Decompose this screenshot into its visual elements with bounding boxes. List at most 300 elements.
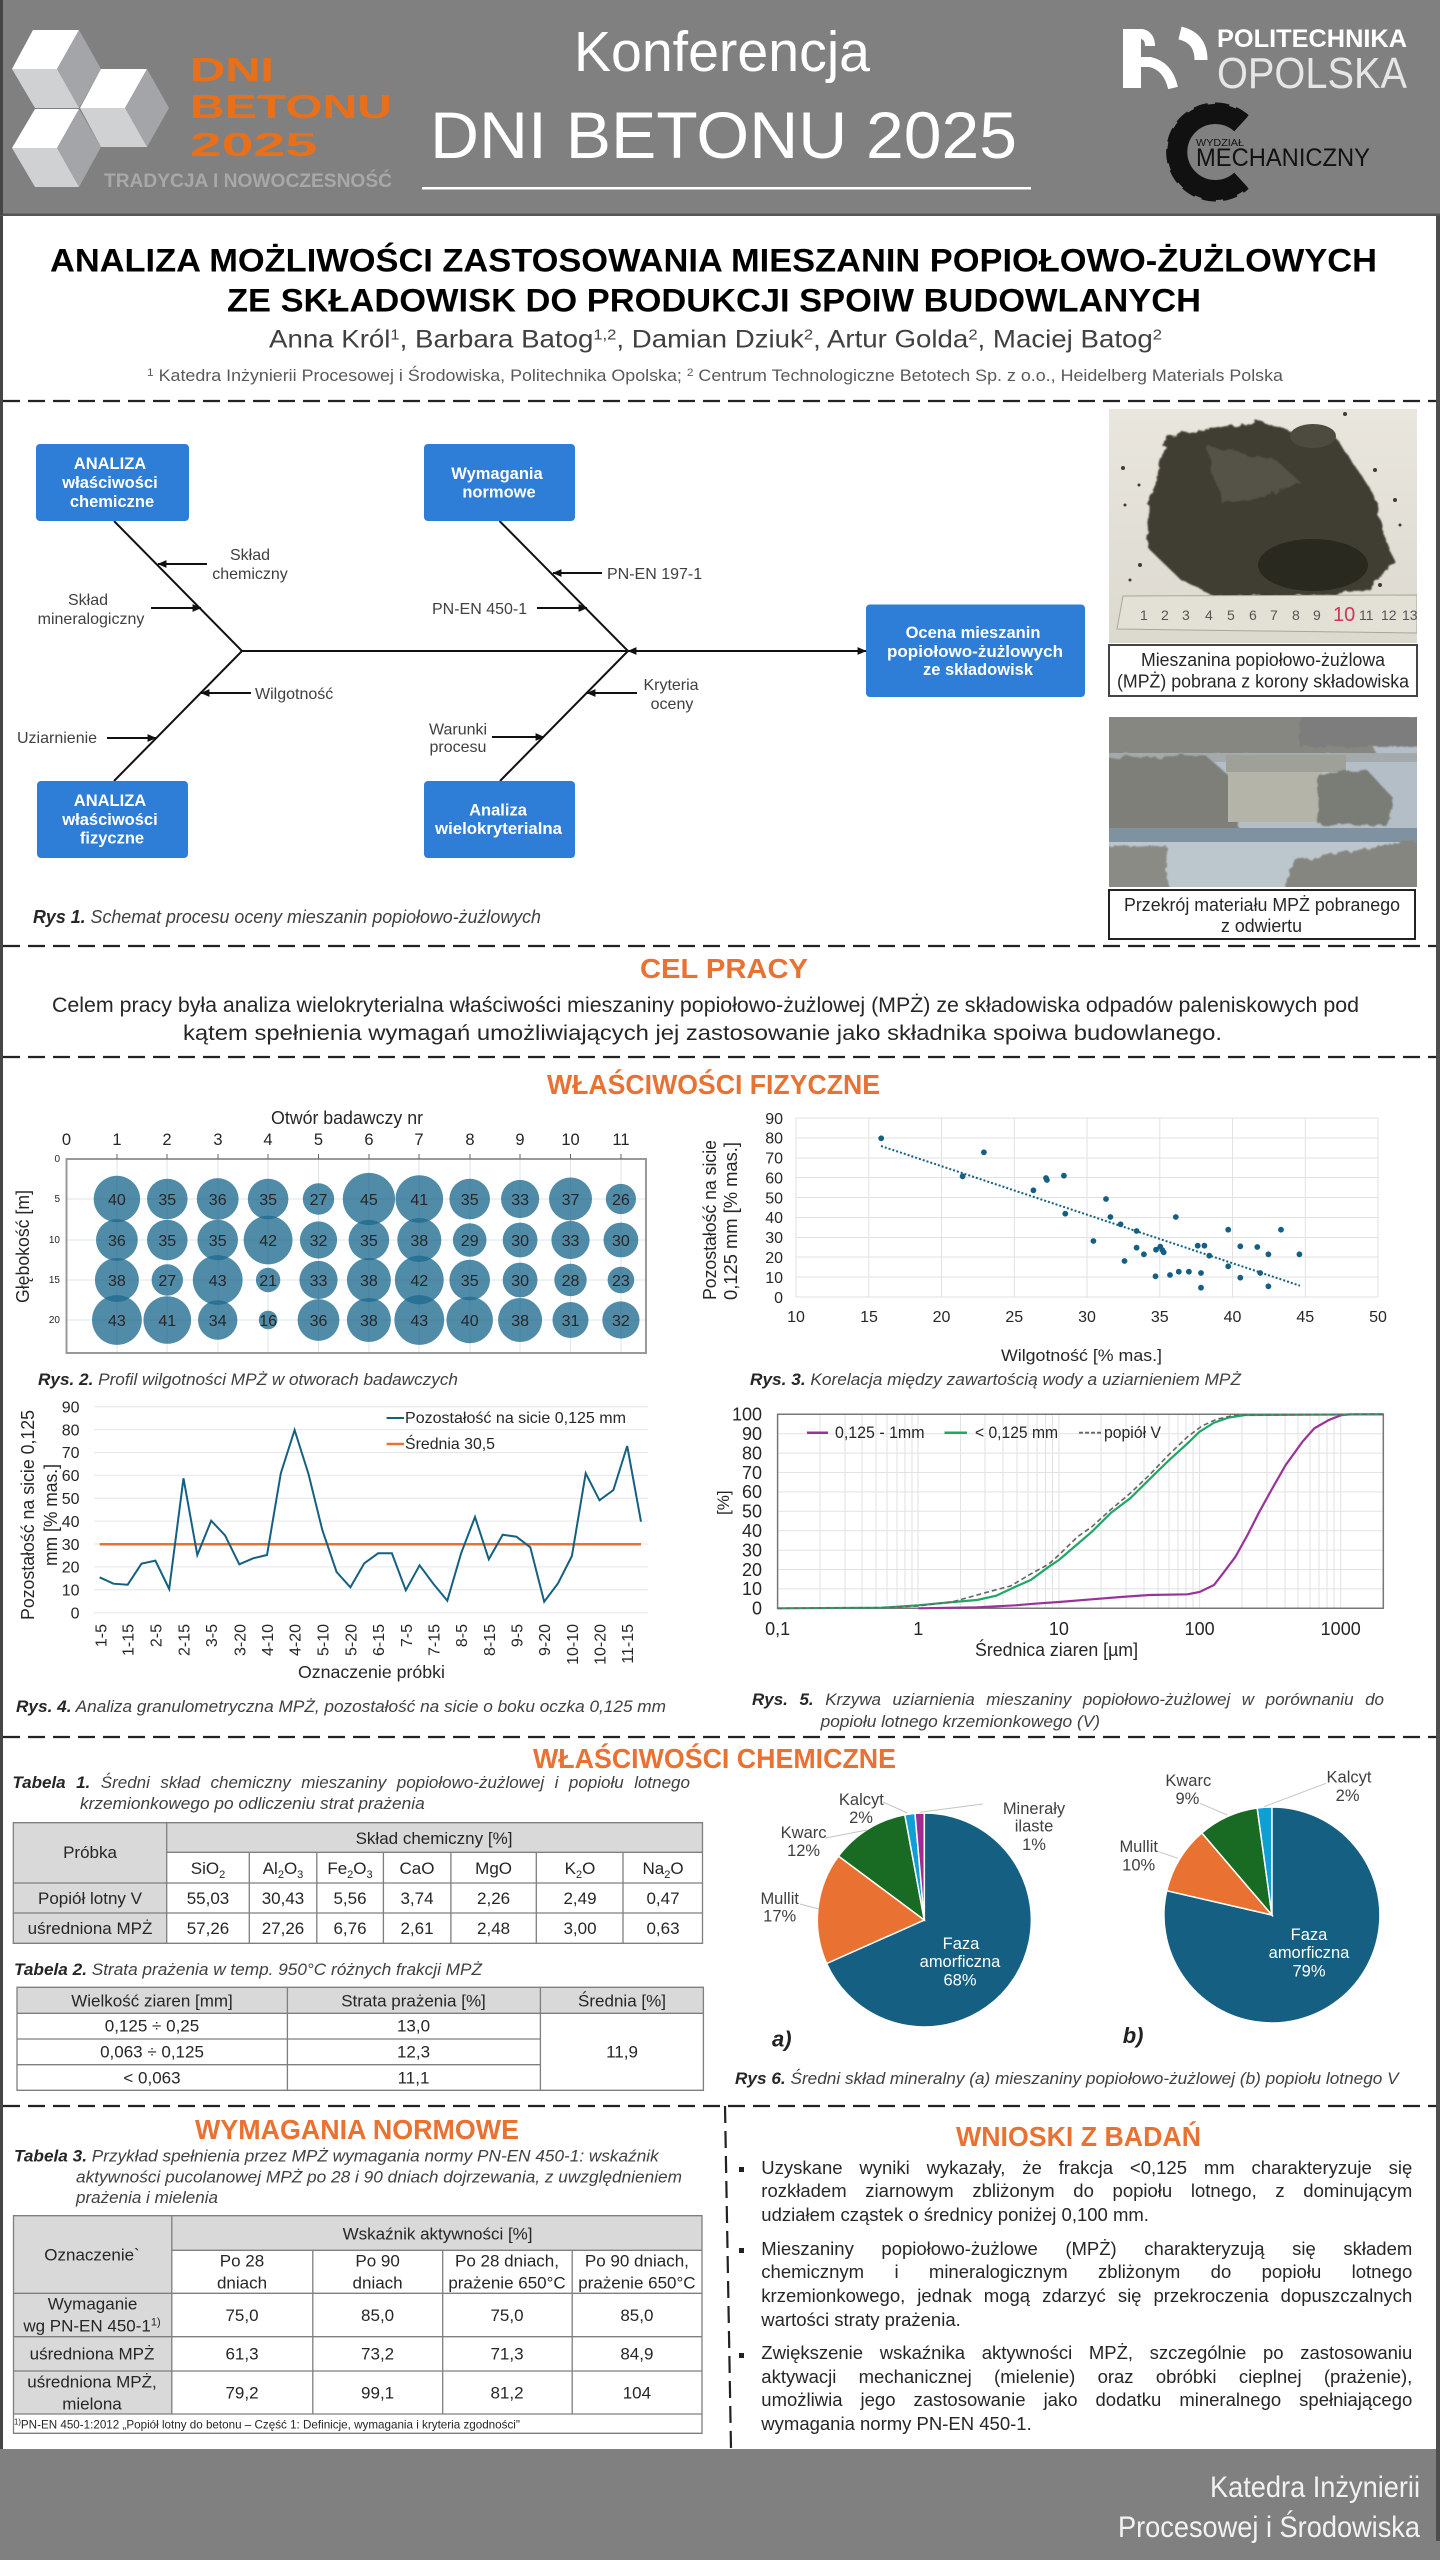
line chart axes: 11-15	[620, 1624, 637, 1664]
bubble chart axes: 8	[465, 1131, 475, 1149]
table 3 caption: prażenia i mielenia	[75, 2188, 218, 2207]
logo text: Dni Betonu 2025: TRADYCJA I NOWOCZESNOŚĆ	[104, 170, 392, 192]
heading: conclusions: WNIOSKI Z BADAŃ	[956, 2121, 1201, 2152]
line chart axes: 3-5	[204, 1624, 221, 1647]
table 1: chemical composition: MgO	[475, 1859, 512, 1878]
table 1: chemical composition: 30,43	[262, 1889, 304, 1908]
table 3: activity index: Wymaganie	[48, 2294, 137, 2313]
logo text: Dni Betonu 2025	[104, 51, 392, 192]
PSD axes: 1	[913, 1619, 923, 1639]
bubble values: 30	[511, 1273, 529, 1290]
bubble values: 38	[511, 1313, 529, 1330]
bubble values: 33	[511, 1192, 529, 1209]
authors: , Maciej Batog	[978, 326, 1153, 354]
bullet 1	[738, 2166, 744, 2172]
bubble values: 43	[108, 1313, 126, 1330]
table 1: chemical composition: O	[582, 1859, 595, 1878]
bubble chart axes: 10	[49, 1235, 60, 1246]
pie chart b: fly ash: Kalcyt	[1327, 1769, 1372, 1787]
scatter axes: 50	[1369, 1309, 1387, 1326]
conclusion 2	[761, 2238, 1412, 2330]
bubble chart axes: 9	[515, 1131, 525, 1149]
table 2: loss on ignition: 0,063 ÷ 0,125	[100, 2043, 204, 2062]
affiliations: 2	[687, 367, 693, 379]
conclusion 3: umożliwia jego zastosowanie jako dodatku mineralnego spełniającego	[761, 2389, 1412, 2410]
caption: Rys 6: Rys 6. Średni skład mineralny (a) mieszaniny popiołowo-żużlowej (b) popiołu lotnego V	[735, 2069, 1400, 2088]
table 3: activity index	[14, 2216, 702, 2433]
table 3: activity index: 75,0	[225, 2306, 259, 2325]
fishbone labels: procesu	[430, 739, 486, 756]
fishbone diagram	[17, 444, 1085, 858]
photo: MPZ sample pile: 1	[1140, 607, 1148, 623]
scatter axes: 0,125 mm [% mas.]	[721, 1142, 741, 1300]
pie chart b: fly ash: 2%	[1336, 1787, 1360, 1805]
pie chart a: MPZ: a)	[772, 2027, 792, 2052]
line chart axes: 4-10	[260, 1624, 277, 1656]
photo: MPZ sample pile: 2	[1161, 607, 1169, 623]
table 3: activity index: 104	[623, 2383, 651, 2402]
table 2: loss on ignition: < 0,063	[123, 2068, 181, 2087]
footer band: Katedra Inżynierii	[1210, 2471, 1420, 2504]
pie chart b: fly ash: b)	[1123, 2023, 1143, 2048]
scatter axes: 60	[765, 1170, 783, 1188]
line chart axes: 10-20	[592, 1624, 610, 1665]
caption: Rys 3: Rys. 3. Korelacja między zawartością wody a uziarnieniem MPŻ	[750, 1370, 1242, 1389]
scatter axes	[700, 1111, 1387, 1365]
scatter axes: 70	[765, 1150, 783, 1168]
table 2 caption: Tabela 2. Strata prażenia w temp. 950°C różnych frakcji MPŻ	[14, 1960, 483, 1979]
curve: below 0.125 mm	[778, 1414, 1383, 1608]
table 3: activity index: Wskaźnik aktywności [%]	[343, 2224, 533, 2243]
bubble values: 21	[259, 1273, 277, 1290]
scatter axes: 10	[765, 1270, 783, 1287]
affiliations: Centrum Technologiczne Betotech Sp. z o.o., Heidelberg Materials Polska	[693, 367, 1284, 385]
PSD axes: 20	[742, 1560, 762, 1580]
logo: Politechnika Opolska: OPOLSKA	[1217, 49, 1408, 98]
box: norm requirements: normowe	[462, 484, 536, 502]
scatter axes: 20	[933, 1309, 950, 1326]
photo: MPZ sample pile: 7	[1270, 607, 1278, 623]
legend: Średnia 30,5	[405, 1434, 495, 1453]
scatter axes: 0	[774, 1290, 783, 1307]
table 1: chemical composition: 0,63	[646, 1919, 680, 1938]
authors: 2	[1153, 326, 1162, 344]
line chart axes: 80	[62, 1422, 80, 1440]
bubble values: 40	[108, 1192, 126, 1209]
table 1: chemical composition: uśredniona MPŻ	[28, 1919, 152, 1938]
line chart axes: 70	[62, 1445, 80, 1462]
bubble values: 30	[511, 1233, 529, 1250]
PSD axes: 30	[742, 1540, 762, 1560]
photo: MPZ sample pile: 5	[1227, 607, 1235, 623]
bubble chart axes: 5	[54, 1194, 60, 1205]
photo: MPZ sample pile	[1109, 409, 1418, 643]
authors: 1,2	[593, 326, 616, 344]
line chart axes: 2-5	[148, 1624, 165, 1647]
conclusion 1: Uzyskane wyniki wykazały, że frakcja <0,125 mm charakteryzuje się	[761, 2157, 1412, 2178]
pie chart a: MPZ: 2%	[849, 1809, 873, 1827]
line chart axes: 60	[62, 1468, 80, 1485]
residue series	[100, 1430, 641, 1602]
goal text: Celem pracy była analiza wielokryterialna właściwości mieszaniny popiołowo-żużlowej (MPŻ) ze składowiska odpadów paleniskowych pod	[52, 993, 1359, 1017]
pie chart b: fly ash: 10%	[1122, 1857, 1156, 1875]
heading: norm requirements: WYMAGANIA NORMOWE	[195, 2114, 519, 2145]
box: physical analysis: fizyczne	[80, 830, 144, 848]
table 3: activity index: prażenie 650°C	[578, 2274, 696, 2293]
pie chart a: MPZ: Kwarc	[781, 1824, 827, 1842]
table 1: chemical composition: 2	[219, 1869, 225, 1881]
chart: scatter moisture vs residue	[700, 1111, 1387, 1365]
conclusion 3: aktywacji mechanicznej (mielenie) oraz obróbki cieplnej (prażenie),	[761, 2366, 1412, 2387]
authors: 2	[804, 326, 813, 344]
table 1: chemical composition: 0,47	[646, 1889, 680, 1908]
line chart axes: Oznaczenie próbki	[298, 1662, 445, 1682]
photo: MPZ sample pile: 3	[1182, 607, 1190, 623]
bubble values: 43	[410, 1313, 428, 1330]
PSD axes: 10	[1049, 1619, 1069, 1639]
pie chart a: MPZ: amorficzna	[920, 1953, 1001, 1971]
photo caption 1: Mieszanina popiołowo-żużlowa	[1141, 649, 1386, 670]
header band	[0, 0, 1440, 216]
bubble values: 27	[158, 1273, 176, 1290]
PSD axes: 40	[742, 1521, 762, 1541]
PSD axes: 0,1	[765, 1619, 790, 1639]
table 1: chemical composition: Fe	[327, 1859, 347, 1878]
table 1: chemical composition: 3,74	[400, 1889, 434, 1908]
line chart axes: 5-20	[343, 1624, 360, 1656]
conclusion 2: chemicznym i mineralogicznym zbliżonym do popiołu lotnego	[761, 2261, 1412, 2282]
box: chemical analysis: chemiczne	[70, 493, 154, 511]
table 3: activity index: Po 28	[220, 2252, 264, 2271]
bullet 3	[738, 2352, 744, 2358]
photo caption 2: Przekrój materiału MPŻ pobranego	[1124, 894, 1400, 915]
legend: popiół V	[1104, 1424, 1161, 1442]
fishbone labels: Skład	[68, 592, 108, 609]
table 3: activity index: 99,1	[361, 2383, 394, 2402]
table 1: chemical composition: O	[284, 1859, 297, 1878]
pie chart a: MPZ: Mullit	[760, 1890, 799, 1908]
scatter axes: Wilgotność [% mas.]	[1001, 1346, 1162, 1365]
legend: 0,125 - 1mm	[835, 1424, 924, 1442]
box: multicriteria analysis: wielokryterialna	[434, 820, 563, 838]
legend: Pozostałość na sicie 0,125 mm	[405, 1410, 626, 1427]
bubble chart axes: 4	[263, 1131, 273, 1149]
PSD axes: 90	[742, 1424, 762, 1444]
fishbone labels: Skład	[230, 547, 270, 564]
logo: concrete cubes	[12, 30, 169, 187]
bubble values: 34	[209, 1313, 227, 1330]
bubble values: 35	[360, 1233, 378, 1250]
scatter axes: 80	[765, 1130, 783, 1148]
PSD axes: 60	[742, 1482, 762, 1502]
goal text	[52, 993, 1359, 1045]
table 1: chemical composition: 2	[278, 1869, 284, 1881]
table 3: activity index: 84,9	[620, 2344, 653, 2363]
pie chart a: MPZ	[760, 1791, 1066, 2052]
line chart axes: 1-5	[94, 1624, 110, 1647]
caption: Rys 2: Rys. 2. Profil wilgotności MPŻ w otworach badawczych	[38, 1370, 458, 1389]
line chart axes: 40	[62, 1514, 80, 1531]
fishbone labels	[17, 547, 702, 756]
bubble values: 42	[410, 1273, 428, 1290]
table 3: activity index: wg PN-EN 450-1	[23, 2317, 151, 2336]
scatter axes: 10	[787, 1309, 805, 1326]
bubble chart axes: Głębokość [m]	[12, 1190, 33, 1303]
box: assessment: Ocena mieszanin	[906, 624, 1040, 642]
logo text: Dni Betonu 2025: DNI	[190, 51, 274, 88]
bubble chart axes: 7	[414, 1131, 424, 1149]
fishbone labels: Wilgotność	[255, 686, 333, 703]
line chart axes: 30	[62, 1537, 80, 1554]
pie chart b: fly ash: 9%	[1175, 1790, 1200, 1808]
table 1: chemical composition: 2,48	[477, 1919, 510, 1938]
line chart axes: 1-15	[121, 1624, 138, 1656]
table 2: loss on ignition: 11,9	[606, 2043, 638, 2062]
table 3: activity index: 61,3	[225, 2344, 259, 2363]
legend	[807, 1424, 1161, 1442]
bubble chart axes: 20	[49, 1315, 60, 1326]
scatter axes: 25	[1005, 1309, 1023, 1326]
table 2: loss on ignition: Średnia [%]	[578, 1992, 666, 2011]
table 1: chemical composition: 2	[664, 1869, 670, 1881]
scatter points	[878, 1135, 1302, 1291]
caption: Rys 5 first line: Rys. 5. Krzywa uziarnienia mieszaniny popiołowo-żużlowej w porównaniu do	[752, 1690, 1384, 1709]
scatter axes: 30	[765, 1230, 783, 1247]
scatter axes: 15	[860, 1309, 878, 1326]
bubble values: 16	[259, 1313, 277, 1330]
poster title: ANALIZA MOŻLIWOŚCI ZASTOSOWANIA MIESZANIN POPIOŁOWO-ŻUŻLOWYCH	[50, 242, 1377, 278]
table 3 caption: Tabela 3. Przykład spełnienia przez MPŻ wymagania normy PN-EN 450-1: wskaźnik	[14, 2147, 660, 2166]
pie chart b: fly ash	[1119, 1769, 1380, 2048]
box: physical analysis	[37, 781, 188, 858]
bubble values: 30	[612, 1233, 630, 1250]
affiliations: Katedra Inżynierii Procesowej i Środowiska, Politechnika Opolska;	[154, 366, 687, 385]
chart: particle size distribution	[714, 1404, 1383, 1660]
table 1: chemical composition: Na	[642, 1859, 664, 1878]
PSD axes: 100	[1185, 1619, 1215, 1639]
line chart axes: 20	[62, 1560, 80, 1576]
bubble values: 38	[360, 1313, 378, 1330]
line chart axes: 10	[62, 1582, 80, 1600]
bubble chart axes	[12, 1108, 630, 1326]
box: multicriteria analysis: Analiza	[469, 802, 528, 820]
conclusion 2: Mieszaniny popiołowo-żużlowe (MPŻ) charakteryzują się składem	[761, 2238, 1412, 2259]
goal text: kątem spełnienia wymagań umożliwiających jej zastosowanie jako składnika spoiwa budowlanego.	[183, 1021, 1222, 1045]
PSD axes: 10	[742, 1579, 762, 1599]
scatter axes: 35	[1151, 1309, 1169, 1326]
caption: Rys 5 second line: popiołu lotnego krzemionkowego (V)	[820, 1712, 1100, 1731]
poster title	[50, 242, 1377, 318]
mean line	[100, 1543, 641, 1546]
pie chart a: MPZ: Faza	[943, 1935, 980, 1953]
table 3: activity index: Oznaczenie`	[44, 2246, 140, 2265]
bubbles	[92, 1173, 640, 1345]
table 1: chemical composition: 5,56	[333, 1889, 367, 1908]
scatter axes: 40	[765, 1210, 783, 1227]
heading: chemical properties: WŁAŚCIWOŚCI CHEMICZNE	[533, 1743, 896, 1774]
scatter axes: 20	[765, 1250, 783, 1267]
photo: MPZ sample pile: 8	[1292, 607, 1300, 623]
table 1: chemical composition: 2,49	[563, 1889, 597, 1908]
table 2: loss on ignition: Wielkość ziaren [mm]	[71, 1992, 233, 2011]
caption: Rys 1: Rys 1. Schemat procesu oceny mieszanin popiołowo-żużlowych	[33, 907, 541, 927]
table 1: chemical composition: Próbka	[63, 1843, 117, 1862]
PSD axes: 50	[742, 1502, 762, 1522]
line chart axes: 50	[62, 1491, 80, 1508]
PSD axes: 0	[752, 1598, 762, 1618]
bubble values: 42	[259, 1233, 277, 1250]
fishbone labels: mineralogiczny	[38, 611, 144, 628]
logo text: Dni Betonu 2025: 2025	[190, 126, 317, 163]
bubble chart axes: Otwór badawczy nr	[271, 1108, 423, 1128]
photo: MPZ sample pile: 6	[1249, 607, 1257, 623]
line chart axes: 3-20	[232, 1624, 249, 1656]
photo caption 1	[1109, 645, 1417, 696]
bubble values: 33	[562, 1233, 580, 1250]
table 1: chemical composition: SiO	[191, 1859, 219, 1878]
table 3: activity index: 1)	[151, 2317, 161, 2329]
table 3 caption	[14, 2147, 682, 2207]
bubble chart axes: 5	[314, 1131, 323, 1149]
photo caption 1: (MPŻ) pobrana z korony składowiska	[1117, 670, 1410, 692]
table 1: chemical composition: 2,61	[400, 1919, 434, 1938]
conclusion 1	[761, 2157, 1412, 2225]
table 3: activity index: 85,0	[361, 2306, 394, 2325]
bubble chart axes: 11	[612, 1131, 630, 1149]
photo: MPZ sample pile: 9	[1313, 607, 1321, 623]
table 1: chemical composition: O	[353, 1859, 367, 1878]
pie chart b: fly ash: amorficzna	[1269, 1944, 1350, 1962]
pie chart b: fly ash: Kwarc	[1165, 1772, 1211, 1790]
PSD axes: [%]	[714, 1490, 733, 1515]
pie chart a: MPZ: Kalcyt	[839, 1791, 884, 1809]
box: norm requirements	[424, 444, 575, 521]
bubble values: 36	[108, 1233, 126, 1250]
bubble chart axes: 2	[162, 1131, 172, 1149]
table 2: loss on ignition: 0,125 ÷ 0,25	[105, 2017, 199, 2036]
bubble values: 38	[108, 1273, 126, 1290]
bubble values: 35	[461, 1192, 479, 1209]
table 1: chemical composition: 2	[576, 1869, 582, 1881]
pie chart a: MPZ: 68%	[943, 1972, 977, 1990]
bubble values: 26	[612, 1192, 630, 1209]
line chart axes: 6-15	[371, 1624, 388, 1656]
PSD axes: 1000	[1321, 1619, 1361, 1639]
line chart axes: 5-10	[315, 1624, 332, 1656]
logo: Wydzial Mechaniczny: MECHANICZNY	[1196, 144, 1370, 172]
PSD axes: 70	[742, 1463, 762, 1483]
scatter axes: 45	[1296, 1309, 1314, 1326]
fishbone labels: Kryteria	[643, 677, 699, 694]
line chart axes: 4-20	[288, 1624, 305, 1656]
table 2: loss on ignition: Strata prażenia [%]	[341, 1992, 486, 2011]
conclusion 3: wymagania normy PN-EN 450-1.	[761, 2413, 1032, 2434]
line chart axes: 10-10	[565, 1624, 582, 1665]
bubble values: 38	[360, 1273, 378, 1290]
box: chemical analysis: właściwości	[61, 474, 158, 492]
authors: , Damian Dziuk	[616, 326, 804, 354]
table 2: loss on ignition	[17, 1987, 703, 2090]
logo: Wydzial Mechaniczny	[1169, 105, 1370, 199]
bubble chart axes: 1	[112, 1131, 122, 1149]
footer band	[0, 2449, 1440, 2560]
photo: MPZ sample pile: 12	[1381, 607, 1397, 623]
line chart axes: 0	[71, 1606, 80, 1622]
table 3: activity index: mielona	[62, 2394, 122, 2413]
bubble chart axes: 10	[561, 1131, 580, 1149]
photo: MPZ sample pile: 4	[1205, 607, 1213, 623]
bubble values: 35	[158, 1192, 176, 1209]
table 1: chemical composition: Al	[263, 1859, 278, 1878]
photo caption 2: z odwiertu	[1221, 915, 1302, 936]
scatter axes: Pozostałość na sicie	[700, 1140, 720, 1300]
table 1: chemical composition: 3	[297, 1869, 303, 1881]
fishbone labels: PN-EN 450-1	[432, 601, 527, 618]
legend: < 0,125 mm	[975, 1424, 1058, 1442]
table 3: activity index: 71,3	[490, 2344, 524, 2363]
bubble values: 35	[461, 1273, 479, 1290]
bubble values: 35	[158, 1233, 176, 1250]
pie chart a: MPZ: 12%	[787, 1842, 820, 1860]
table 2: loss on ignition: 13,0	[397, 2017, 430, 2036]
table 1: chemical composition: 3	[367, 1869, 373, 1881]
fishbone labels: Uziarnienie	[17, 730, 97, 747]
bubble values: 31	[562, 1313, 580, 1330]
scatter axes: 30	[1078, 1309, 1096, 1326]
conference title: DNI BETONU 2025	[430, 98, 1017, 172]
table 2: loss on ignition: 12,3	[397, 2043, 430, 2062]
scatter axes: 90	[765, 1111, 783, 1128]
pie chart a: MPZ: 1%	[1022, 1836, 1046, 1854]
pie chart b: fly ash: Faza	[1291, 1926, 1328, 1944]
table 1: chemical composition: 6,76	[333, 1919, 367, 1938]
table 1: chemical composition: 27,26	[262, 1919, 304, 1938]
PSD axes: Średnica ziaren [µm]	[975, 1639, 1138, 1660]
fishbone labels: chemiczny	[212, 566, 288, 583]
box: physical analysis: właściwości	[61, 811, 158, 829]
affiliations: 1	[147, 367, 154, 379]
table 3: activity index: Po 90 dniach,	[585, 2252, 689, 2271]
table 1: chemical composition: Skład chemiczny [%]	[356, 1829, 512, 1848]
bubble values: 28	[562, 1273, 580, 1290]
fishbone labels: oceny	[651, 696, 693, 713]
line chart axes: 9-20	[537, 1624, 554, 1656]
conclusion 1: udziałem cząstek o średnicy poniżej 0,100 mm.	[761, 2204, 1149, 2225]
bubble values: 33	[310, 1273, 328, 1290]
table 1: chemical composition: 57,26	[187, 1919, 229, 1938]
table 1: chemical composition: K	[565, 1859, 576, 1878]
bubble values: 36	[310, 1313, 328, 1330]
table 1 caption second line: krzemionkowego po odliczeniu strat prażenia	[80, 1794, 425, 1813]
bubble chart axes: 15	[49, 1275, 60, 1286]
pie chart b: fly ash: Mullit	[1119, 1838, 1158, 1856]
bubble values: 32	[310, 1233, 328, 1250]
conclusion 3	[761, 2342, 1412, 2434]
line chart axes: Pozostałość na sicie 0,125	[18, 1410, 38, 1620]
pie chart a: MPZ: 17%	[763, 1908, 797, 1926]
bubble values: 38	[410, 1233, 428, 1250]
line chart axes: 7-15	[426, 1624, 444, 1656]
heading: physical properties: WŁAŚCIWOŚCI FIZYCZNE	[547, 1069, 880, 1100]
line chart axes: 7-5	[399, 1624, 416, 1647]
bubble values: 40	[461, 1313, 479, 1330]
table 3: activity index: 85,0	[620, 2306, 653, 2325]
photo caption 2	[1109, 890, 1415, 939]
bubble chart axes: 6	[364, 1131, 374, 1149]
conclusion 2: wartości straty prażenia.	[761, 2309, 961, 2330]
box: assessment: popiołowo-żużlowych	[887, 643, 1063, 661]
scatter axes: 50	[765, 1190, 783, 1208]
